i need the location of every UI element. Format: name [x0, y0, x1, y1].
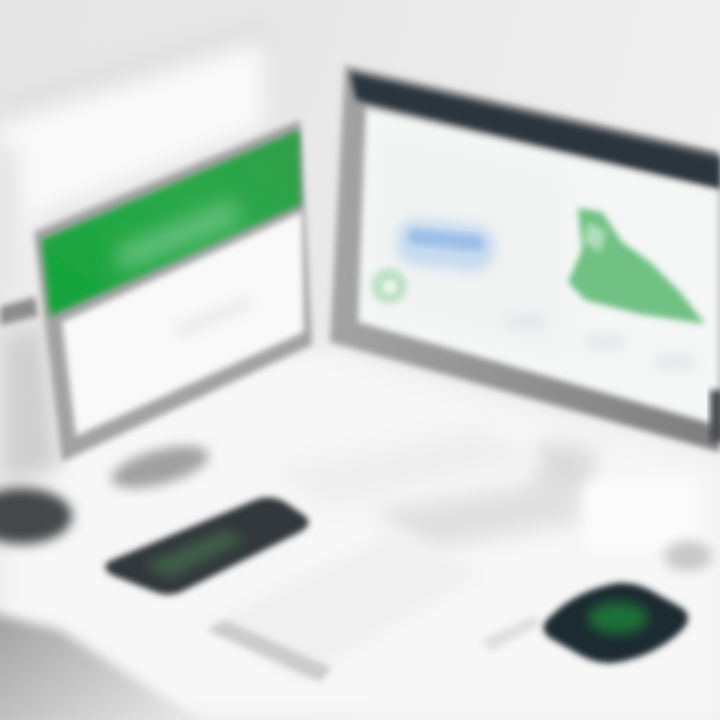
desk surface [0, 340, 720, 720]
dark phone [105, 497, 309, 595]
white screen body [62, 212, 304, 436]
tablet green centre [588, 602, 648, 634]
pen [207, 620, 332, 682]
notepad [205, 530, 480, 680]
right monitor [330, 65, 720, 452]
small grey device [107, 438, 213, 496]
stylus [482, 615, 540, 652]
right edge dark accent [710, 390, 720, 442]
green header [42, 130, 301, 316]
back monitor [0, 12, 275, 300]
green monitor [34, 120, 312, 462]
white box right [585, 480, 695, 550]
dark top bar [350, 72, 720, 190]
monitor stand [370, 440, 600, 550]
blue pill core [407, 228, 485, 252]
white screen [358, 108, 720, 426]
light chart panel tint [375, 135, 560, 350]
header highlight [115, 200, 240, 272]
phone green glow [145, 530, 245, 578]
monitor frame [330, 65, 720, 452]
desk front edge [0, 610, 215, 720]
small green circle centre [383, 280, 397, 294]
keyboard [270, 425, 540, 510]
green chart blob [568, 208, 705, 324]
small grey gadget [664, 541, 712, 571]
dark round object [0, 488, 72, 544]
screen detail [175, 295, 252, 338]
blue pill [395, 217, 497, 273]
footer placeholders [505, 315, 695, 369]
back monitor stand band [0, 297, 38, 326]
monitor frame [34, 120, 312, 462]
left edge stand and shadow [0, 328, 60, 485]
dark tablet with green glow [543, 583, 688, 663]
small green circle [371, 268, 407, 304]
